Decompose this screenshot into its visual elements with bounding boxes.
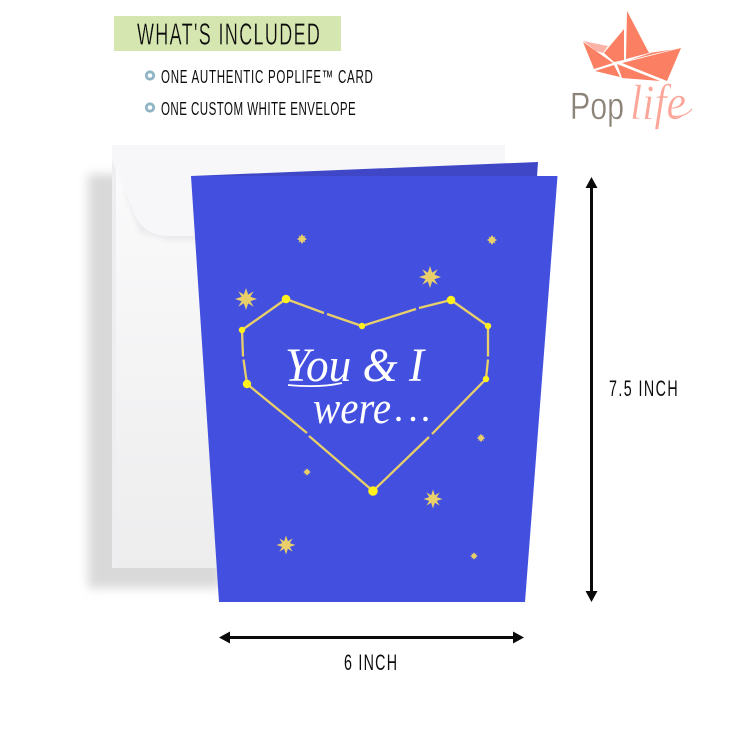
height label: 7.5 INCH xyxy=(609,376,678,401)
logo wordmark: life xyxy=(630,74,686,130)
card message: were xyxy=(313,382,391,433)
greeting card xyxy=(191,162,558,602)
logo wordmark: Pop xyxy=(570,86,624,128)
card message xyxy=(285,339,428,433)
included items list: ONE AUTHENTIC POPLIFE™ CARD xyxy=(161,67,373,88)
logo: Poplife paper boat xyxy=(570,11,692,130)
envelope with shadow xyxy=(88,145,505,588)
included items list: ONE CUSTOM WHITE ENVELOPE xyxy=(161,99,356,120)
included items list xyxy=(146,67,373,120)
heading: what's included: WHAT'S INCLUDED xyxy=(137,19,320,52)
width arrow xyxy=(219,632,524,644)
width label: 6 INCH xyxy=(344,650,397,675)
logo wordmark xyxy=(570,74,692,130)
stars xyxy=(235,234,497,560)
card message: You & I xyxy=(285,339,426,392)
heart constellation xyxy=(239,295,491,496)
height arrow xyxy=(586,177,598,602)
